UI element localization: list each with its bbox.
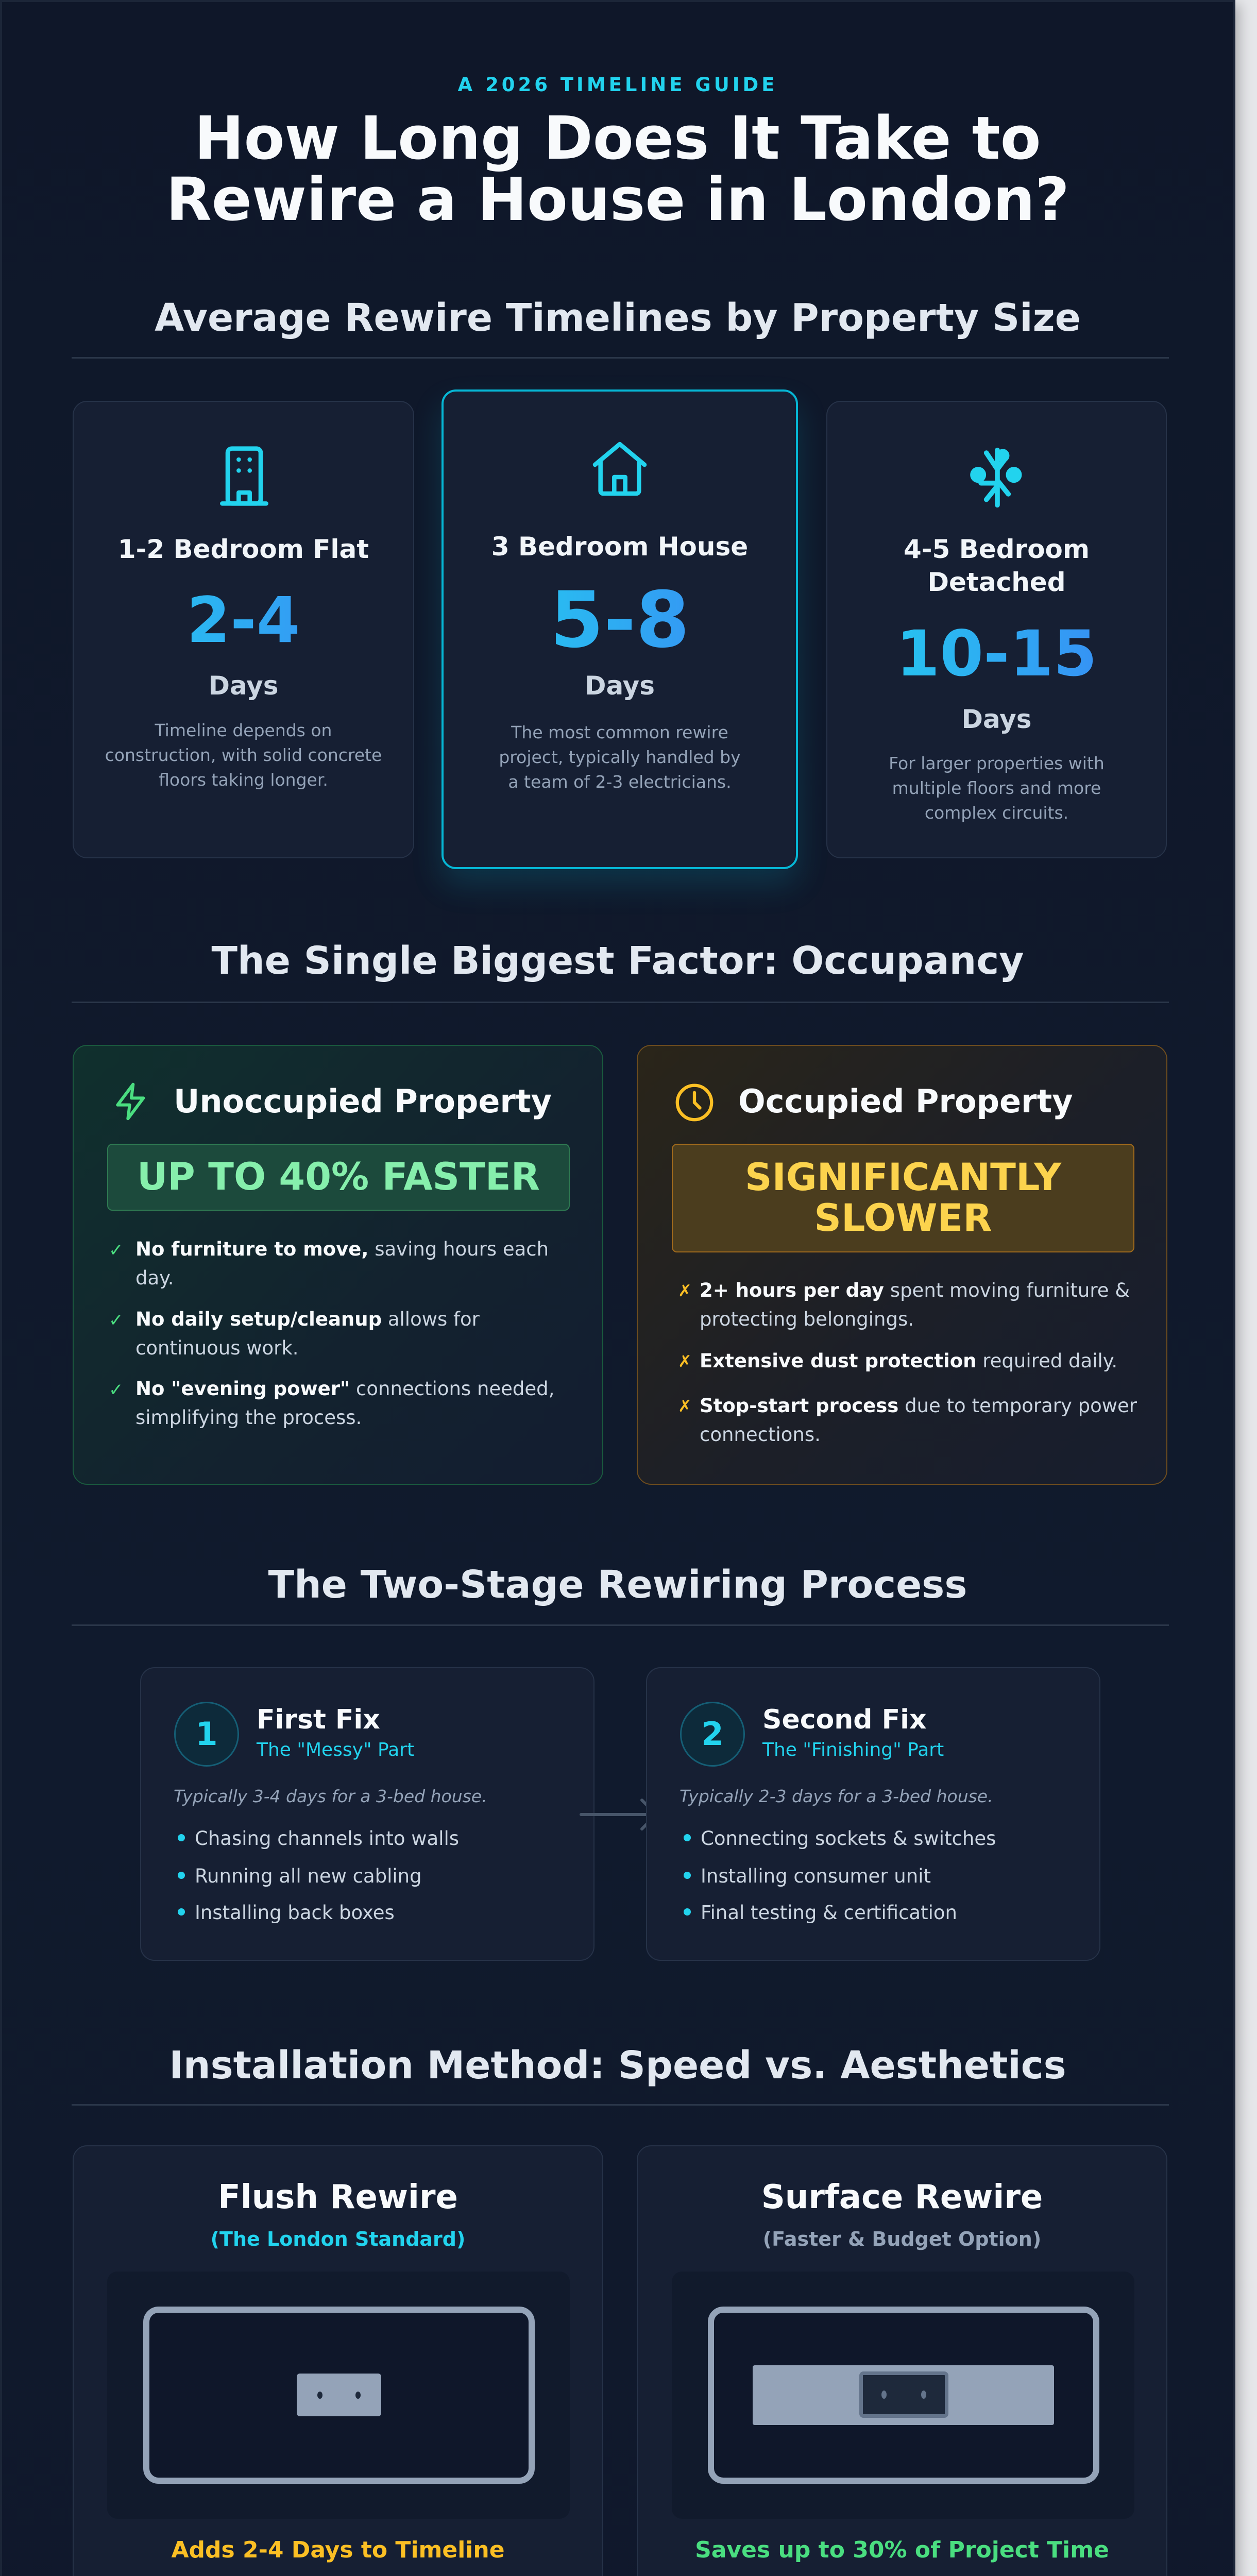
card title: 1-2 Bedroom Flat bbox=[118, 534, 369, 564]
number: 2-4 bbox=[186, 584, 300, 657]
bullet list: No daily setup/cleanup allows for continuous work. bbox=[135, 1308, 480, 1359]
step title: Second Fix bbox=[762, 1704, 926, 1735]
panel: occupied bbox=[637, 1045, 1167, 1485]
bullet list: No "evening power" connections needed, simplifying the process. bbox=[135, 1378, 554, 1429]
bullet list bbox=[678, 1279, 1137, 1446]
number bbox=[74, 587, 413, 654]
list: Connecting sockets & switches bbox=[701, 1827, 996, 1850]
subtitle: The "Messy" Part bbox=[257, 1739, 414, 1760]
number: 5-8 bbox=[550, 575, 689, 665]
badge: SLOWER bbox=[814, 1196, 992, 1240]
highlight: Saves up to 30% of Project Time bbox=[695, 2537, 1109, 2563]
badge: UP TO 40% FASTER bbox=[137, 1155, 540, 1199]
bullet list: Extensive dust protection required daily. bbox=[700, 1350, 1117, 1372]
note: Typically 3-4 days for a 3-bed house. bbox=[174, 1786, 487, 1806]
heading: two-stage: The Two-Stage Rewiring Process bbox=[268, 1563, 967, 1607]
subtitle: The "Finishing" Part bbox=[762, 1739, 944, 1760]
description: For larger properties with multiple floors and more complex circuits. bbox=[889, 753, 1105, 823]
days: Days bbox=[208, 671, 279, 701]
illustration: flush socket bbox=[107, 2272, 570, 2519]
highlight: Adds 2-4 Days to Timeline bbox=[171, 2537, 505, 2563]
heading: property size: Average Rewire Timelines by Property Size bbox=[155, 296, 1081, 340]
card: 3 bedroom house bbox=[441, 389, 798, 869]
panel: first fix bbox=[140, 1667, 594, 1961]
panel: unoccupied bbox=[73, 1045, 603, 1485]
card title: 3 Bedroom House bbox=[491, 532, 748, 562]
list: Installing back boxes bbox=[195, 1902, 395, 1924]
bullet list: 2+ hours per day spent moving furniture & protecting belongings. bbox=[700, 1279, 1130, 1330]
bullet list: Stop-start process due to temporary power connections. bbox=[700, 1395, 1137, 1446]
number bbox=[827, 620, 1166, 687]
heading: occupancy: The Single Biggest Factor: Occupancy bbox=[212, 939, 1024, 983]
bullet list bbox=[109, 1238, 554, 1429]
icon: building bbox=[220, 446, 268, 506]
badge: SIGNIFICANTLY bbox=[745, 1156, 1061, 1199]
bullet list: ✗ bbox=[678, 1396, 692, 1416]
step badge 1: 1 bbox=[195, 1715, 218, 1753]
days: Days bbox=[585, 671, 655, 701]
panel: surface rewire bbox=[637, 2145, 1167, 2576]
illustration: surface trunking bbox=[672, 2272, 1134, 2519]
title: How Long Does It Take to bbox=[194, 104, 1041, 173]
icon: house bbox=[592, 442, 647, 496]
card title: 4-5 Bedroom bbox=[904, 534, 1090, 564]
list bbox=[178, 1827, 459, 1924]
icon: clock bbox=[676, 1084, 713, 1121]
description: Timeline depends on construction, with solid concrete floors taking longer. bbox=[105, 720, 382, 790]
step badge 2 bbox=[680, 1702, 745, 1767]
badge bbox=[672, 1144, 1134, 1252]
icon: lightning bbox=[116, 1083, 145, 1120]
card: 4-5 bedroom detached bbox=[826, 401, 1167, 858]
bullet list: ✓ bbox=[109, 1240, 124, 1261]
subtitle: (The London Standard) bbox=[211, 2228, 465, 2250]
card: 1-2 bedroom flat bbox=[73, 401, 414, 858]
list: Running all new cabling bbox=[195, 1865, 422, 1887]
days: Days bbox=[961, 704, 1032, 734]
bullet list: ✓ bbox=[109, 1310, 124, 1331]
heading: installation method: Installation Method: Speed vs. Aesthetics bbox=[169, 2043, 1066, 2088]
list bbox=[684, 1827, 996, 1924]
title: Flush Rewire bbox=[218, 2178, 458, 2216]
panel heading: Occupied Property bbox=[738, 1082, 1073, 1120]
list: Final testing & certification bbox=[701, 1902, 957, 1924]
number: 10-15 bbox=[896, 617, 1097, 690]
badge bbox=[107, 1144, 570, 1211]
panel heading: Unoccupied Property bbox=[174, 1082, 552, 1120]
icon: network bbox=[970, 447, 1022, 508]
step title: First Fix bbox=[257, 1704, 380, 1735]
number bbox=[444, 579, 796, 662]
eyebrow: A 2026 TIMELINE GUIDE bbox=[457, 74, 778, 96]
bullet list: ✗ bbox=[678, 1351, 692, 1371]
panel: flush rewire bbox=[73, 2145, 603, 2576]
bullet list: ✓ bbox=[109, 1380, 124, 1400]
subtitle: (Faster & Budget Option) bbox=[763, 2228, 1041, 2250]
bullet list: No furniture to move, saving hours each day. bbox=[135, 1238, 549, 1289]
step badge 1 bbox=[174, 1702, 239, 1767]
panel: second fix bbox=[646, 1667, 1100, 1961]
bullet list: ✗ bbox=[678, 1281, 692, 1300]
list: Installing consumer unit bbox=[701, 1865, 931, 1887]
description: The most common rewire project, typically handled by a team of 2-3 electricians. bbox=[499, 722, 741, 792]
title: Rewire a House in London? bbox=[166, 165, 1069, 234]
card title: Detached bbox=[927, 567, 1065, 597]
note: Typically 2-3 days for a 3-bed house. bbox=[680, 1786, 993, 1806]
arrow bbox=[580, 1799, 646, 1831]
title: Surface Rewire bbox=[761, 2178, 1043, 2216]
title bbox=[166, 104, 1069, 234]
step badge 2: 2 bbox=[701, 1715, 724, 1753]
card title bbox=[904, 534, 1090, 597]
list: Chasing channels into walls bbox=[195, 1827, 459, 1850]
